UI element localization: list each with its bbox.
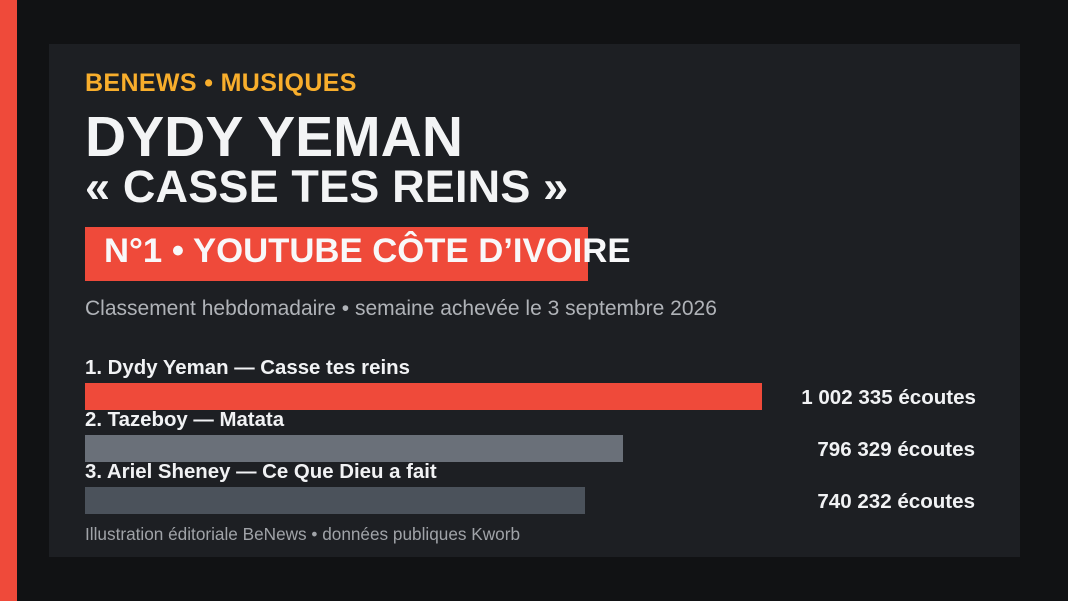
footer credit: Illustration éditoriale BeNews • données publiques Kworb	[85, 524, 520, 544]
title: artist: DYDY YEMAN	[85, 105, 463, 169]
eyebrow heading: BENEWS • MUSIQUES	[85, 68, 357, 96]
panel: main card	[49, 44, 1020, 557]
row 3 value: 740 232 écoutes	[817, 490, 975, 513]
subtitle: Classement hebdomadaire • semaine achevée le 3 septembre 2026	[85, 297, 717, 320]
row 1 value: 1 002 335 écoutes	[801, 386, 976, 409]
row 2 label: 2. Tazeboy — Matata	[85, 409, 284, 431]
row 3 label: 3. Ariel Sheney — Ce Que Dieu a fait	[85, 461, 437, 483]
left accent stripe	[0, 0, 17, 601]
row 1 label: 1. Dydy Yeman — Casse tes reins	[85, 357, 410, 379]
badge background	[85, 227, 588, 281]
row 1 bar	[85, 383, 762, 410]
badge text: N°1 • YOUTUBE CÔTE D’IVOIRE	[104, 232, 630, 270]
row 3 bar	[85, 487, 585, 514]
row 2 value: 796 329 écoutes	[817, 438, 975, 461]
row 2 bar	[85, 435, 623, 462]
title: song: « CASSE TES REINS »	[85, 161, 568, 212]
